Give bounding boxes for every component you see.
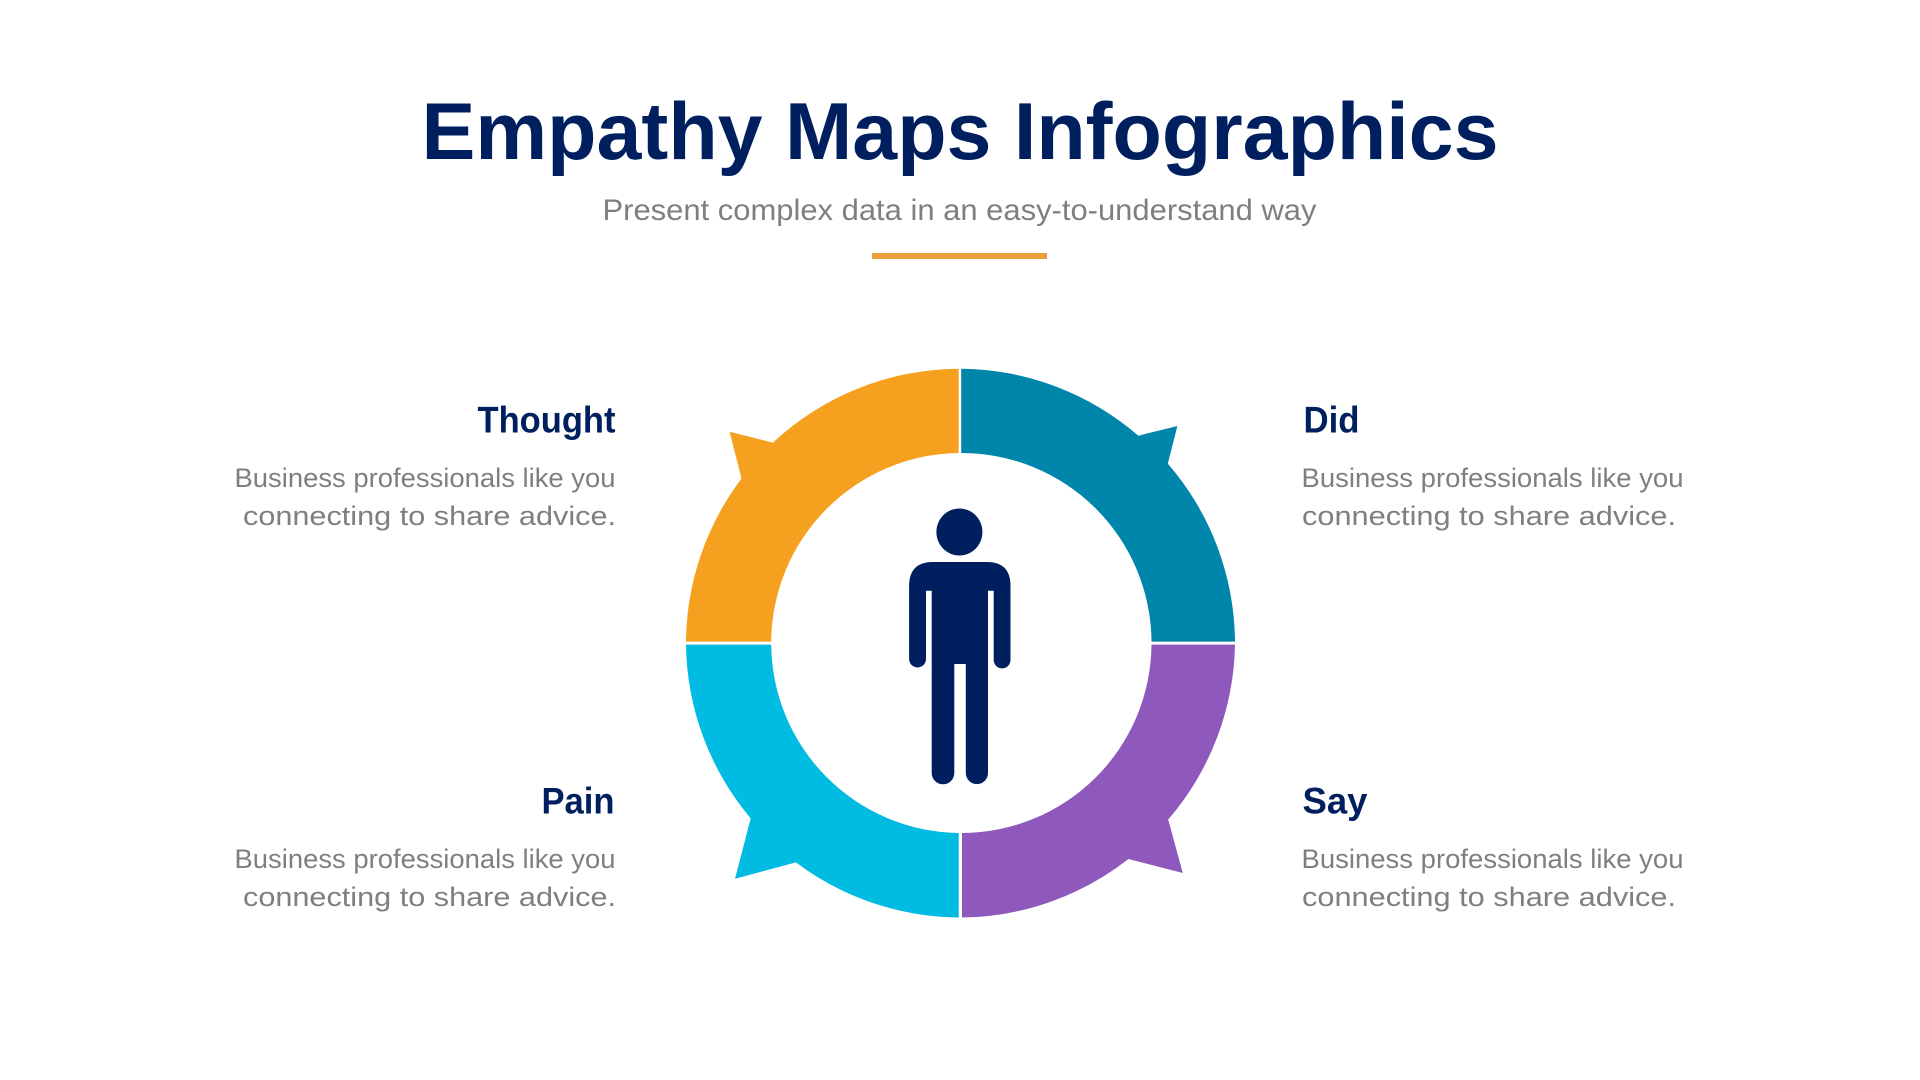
panel: Thought text xyxy=(234,400,616,531)
text block: Pain description: Business professionals like you xyxy=(234,844,616,874)
segment: Thought (orange) with arrow xyxy=(686,369,959,642)
segment: Did (teal) with arrow xyxy=(961,369,1235,642)
chart: segmented ring with arrow points xyxy=(686,369,1235,918)
text block: Say description: connecting to share advice. xyxy=(1302,882,1676,912)
segment: Say (purple) with arrow xyxy=(962,645,1235,918)
text block: Did description xyxy=(1302,463,1684,531)
panel: Say text xyxy=(1302,780,1684,912)
title: Empathy Maps Infographics xyxy=(422,87,1498,177)
text block: Did description: Business professionals like you xyxy=(1302,463,1684,493)
text block: Did description: connecting to share advice. xyxy=(1302,501,1676,531)
text block: Thought description xyxy=(234,463,616,531)
text block: Say description xyxy=(1302,844,1684,912)
text block: Pain description xyxy=(234,844,616,912)
panel: Pain text xyxy=(234,780,616,912)
icon: body xyxy=(909,562,1010,784)
text block: Say description: Business professionals like you xyxy=(1302,844,1684,874)
icon: person figure xyxy=(909,508,1010,784)
subtitle: Present complex data in an easy-to-understand way xyxy=(602,194,1317,227)
segment: Pain (cyan) with arrow xyxy=(686,645,959,918)
heading: Pain: Pain xyxy=(542,780,614,821)
text block: Thought description: connecting to share advice. xyxy=(243,501,616,531)
title accent rule xyxy=(872,253,1047,259)
heading: Did: Did xyxy=(1304,400,1360,441)
icon: head xyxy=(936,508,982,556)
text block: Pain description: connecting to share advice. xyxy=(243,882,616,912)
heading: Thought: Thought xyxy=(478,400,616,441)
panel: Did text xyxy=(1302,400,1684,531)
text block: Thought description: Business professionals like you xyxy=(234,463,616,493)
heading: Say: Say xyxy=(1302,780,1368,821)
